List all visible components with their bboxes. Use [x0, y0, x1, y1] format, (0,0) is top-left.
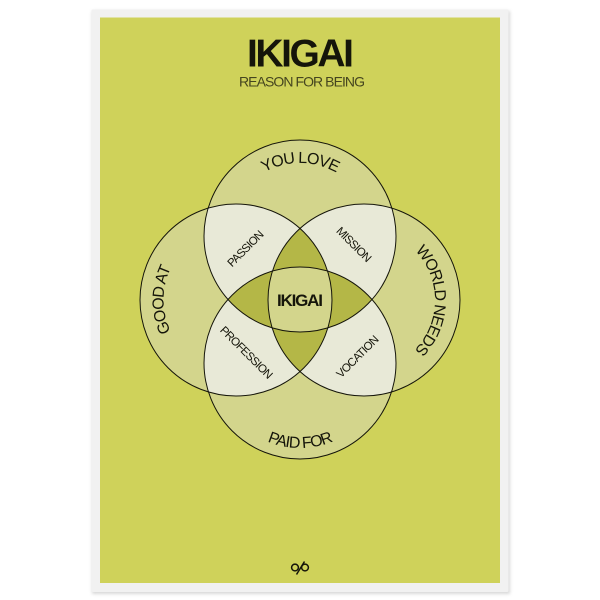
circle outlines [140, 140, 460, 459]
label: world needs: WORLD NEEDS [416, 244, 446, 356]
ikigai venn diagram [140, 140, 460, 460]
icon: logo [292, 562, 308, 574]
label: paid for: PAID FOR [268, 432, 333, 448]
label: vocation: VOCATION [335, 334, 381, 381]
dark triple overlaps [228, 229, 372, 371]
label: you love: YOU LOVE [260, 152, 340, 172]
label: mission: MISSION [333, 225, 373, 265]
centre overlap [268, 268, 332, 332]
circle fills [140, 140, 460, 459]
title: IKIGAI [247, 32, 354, 76]
label: profession: PROFESSION [217, 324, 274, 382]
subtitle: REASON FOR BEING [239, 74, 365, 90]
label: passion: PASSION [226, 229, 266, 270]
poster frame [92, 10, 510, 594]
label: ikigai centre: IKIGAI [277, 291, 323, 310]
light pair overlaps [204, 204, 396, 396]
label: good at: GOOD AT [152, 264, 170, 334]
